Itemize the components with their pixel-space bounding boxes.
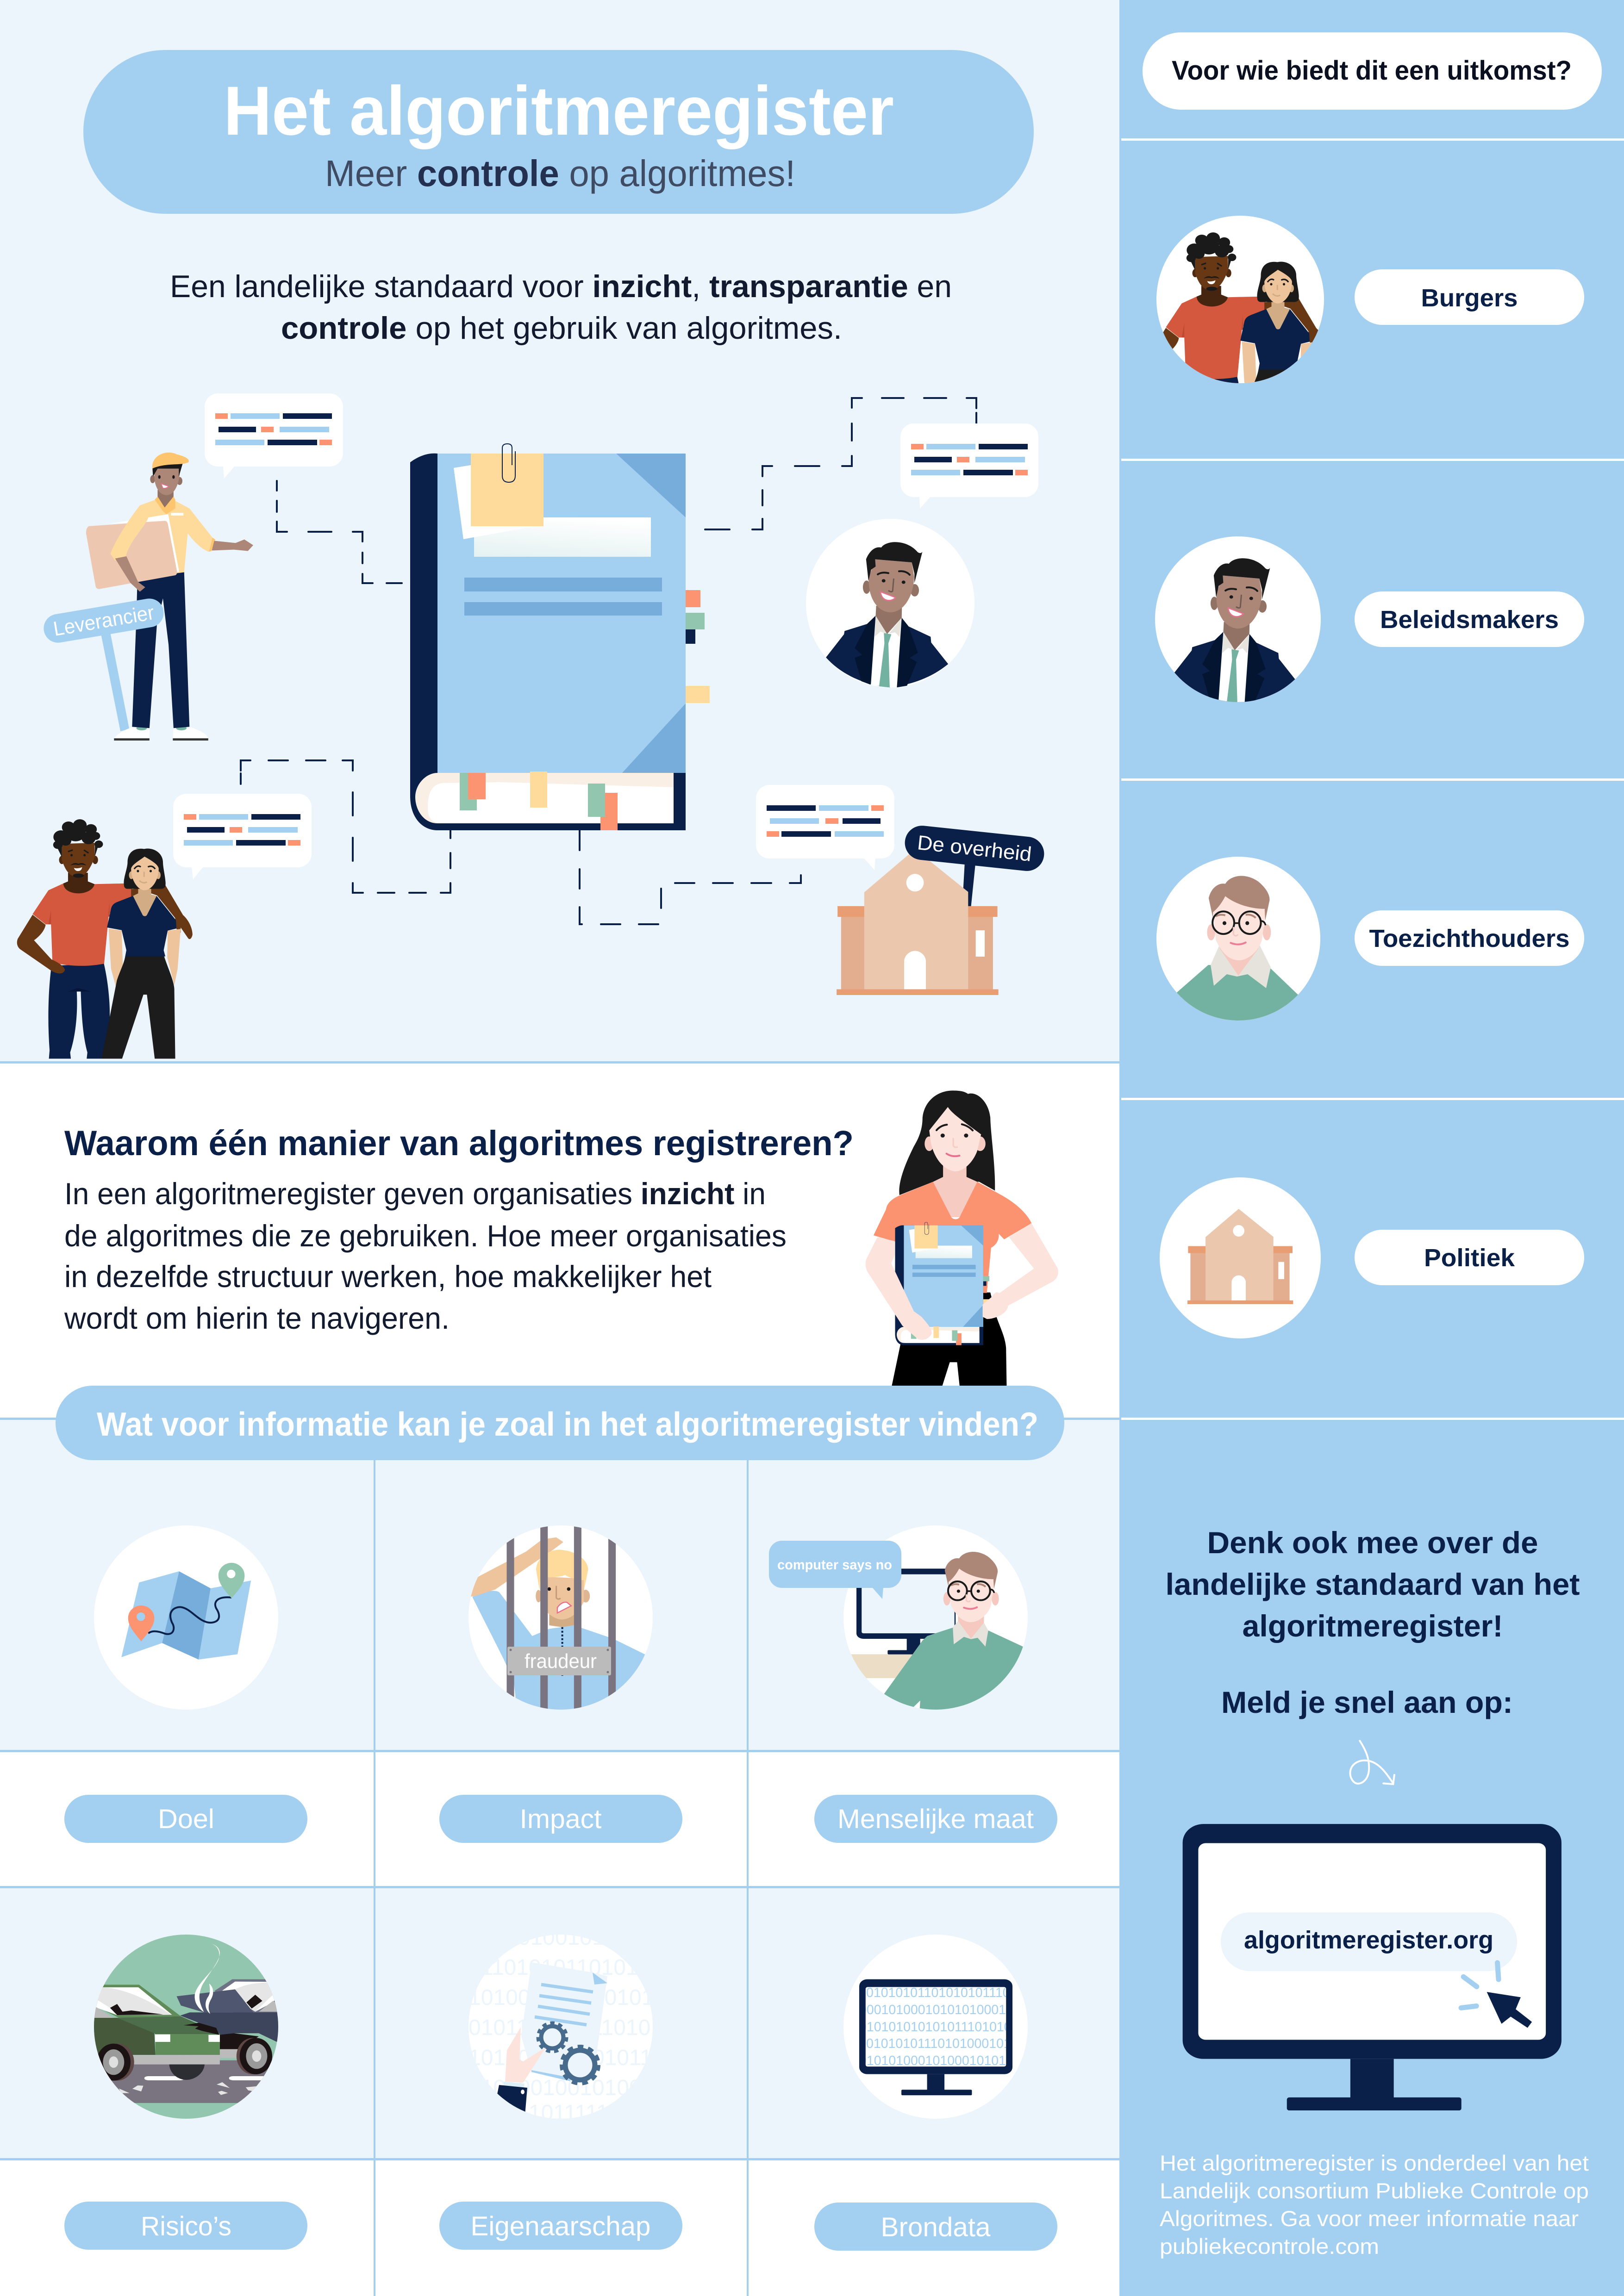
intro text: Een landelijke standaard voor inzicht, transparantie en <box>170 269 952 304</box>
title banner <box>83 50 1034 214</box>
binary background: 1010010101001011010 <box>468 1985 702 2010</box>
icon: map (Doel) <box>94 1525 278 1710</box>
binary background: 0101101010110101001 <box>468 2016 700 2040</box>
label: Menselijke maat <box>814 1795 1057 1843</box>
section banner <box>56 1386 1064 1460</box>
icon: monitor with binary data (Brondata): 0101010001010001010101 <box>859 2053 1021 2068</box>
supplier sign: Leverancier <box>52 601 156 641</box>
label: Doel: Doel <box>158 1804 214 1834</box>
label: Risico's <box>64 2202 307 2250</box>
speech bubble: supplier <box>205 393 343 479</box>
icon: person behind bars (Impact) <box>461 1525 653 1715</box>
call to action text <box>1166 1525 1580 1719</box>
label: Brondata: Brondata <box>881 2212 991 2242</box>
illustration: supplier figure <box>42 453 253 740</box>
label: Impact <box>439 1795 682 1843</box>
audience: Burgers: Burgers <box>1421 284 1518 312</box>
illustration: government building with sign <box>837 824 1046 995</box>
label: Brondata <box>814 2203 1057 2251</box>
nameplate <box>507 1647 611 1675</box>
illustration: woman holding the book <box>866 1090 1058 1386</box>
intro text <box>170 269 952 346</box>
icon: large monitor with url <box>1183 1824 1562 2110</box>
url pill <box>1221 1912 1517 1971</box>
binary background: 0110101011010101101 <box>468 1955 699 1980</box>
audience: Toezichthouders: Toezichthouders <box>1369 925 1569 952</box>
sidebar heading <box>1143 32 1602 110</box>
footer note: Landelijk consortium Publieke Controle op <box>1160 2178 1589 2203</box>
icon: document with gears (Eigenaarschap) <box>468 1935 653 2119</box>
heading: why one way: Waarom één manier van algoritmes registreren? <box>64 1124 854 1163</box>
audience: Toezichthouders <box>1153 857 1584 1027</box>
icon: curly arrow <box>1350 1741 1394 1784</box>
audience: Burgers <box>1156 216 1584 383</box>
label: Menselijke maat: Menselijke maat <box>837 1804 1034 1834</box>
icon: monitor with binary data (Brondata): 0101010101010111010101 <box>859 2020 1018 2035</box>
label: Eigenaarschap <box>439 2202 682 2250</box>
icon: monitor with binary data (Brondata): 0001010001010101000101 <box>859 2003 1021 2017</box>
icon: monitor with binary data (Brondata): 0101010111010100010101 <box>866 2036 1025 2051</box>
binary background: 1010110111110101101 <box>468 2101 693 2125</box>
binary background <box>469 1935 653 2119</box>
illustration: policy maker <box>806 519 974 687</box>
body text: why one way: de algoritmes die ze gebruiken. Hoe meer organisaties <box>64 1219 787 1253</box>
icon: computer says no (Menselijke maat) <box>769 1525 1028 1710</box>
intro text: controle op het gebruik van algoritmes. <box>281 311 842 346</box>
body text: why one way <box>64 1176 787 1335</box>
government sign <box>903 824 1046 873</box>
binary background: 1010010101010110101 <box>468 2046 702 2070</box>
binary background: 0101010010101100101 <box>468 1925 702 1950</box>
footer note: Algoritmes. Ga voor meer informatie naar <box>1160 2206 1579 2231</box>
binary background: 0101001001010010100 <box>468 2076 703 2100</box>
title: Het algoritmeregister <box>224 72 894 149</box>
dashed connectors <box>241 398 976 924</box>
panel: grid backgrounds <box>0 1419 1120 2296</box>
speech bubble: computer says no: computer says no <box>777 1557 892 1573</box>
label: Eigenaarschap: Eigenaarschap <box>470 2211 651 2241</box>
section banner: Wat voor informatie kan je zoal in het algoritmeregister vinden? <box>97 1406 1038 1443</box>
speech bubble: government <box>756 785 894 870</box>
audience: Politiek <box>1160 1177 1584 1338</box>
footer note: Het algoritmeregister is onderdeel van het <box>1160 2151 1589 2175</box>
label: Doel <box>64 1795 307 1843</box>
audience: Beleidsmakers <box>1155 536 1584 703</box>
speech bubble: computer says no <box>769 1541 901 1599</box>
label: Impact: Impact <box>519 1804 602 1834</box>
body text: why one way: in dezelfde structuur werken, hoe makkelijker het <box>64 1259 712 1294</box>
speech bubble: policy maker <box>900 423 1038 509</box>
footer note <box>1160 2151 1589 2259</box>
footer note: publiekecontrole.com <box>1160 2234 1379 2259</box>
body text: why one way: In een algoritmeregister geven organisaties inzicht in <box>64 1176 766 1211</box>
label: Risico's: Risico’s <box>141 2211 231 2241</box>
icon: monitor with binary data (Brondata): 0101010110101010111010 <box>866 1985 1024 2000</box>
call to action text: landelijke standaard van het <box>1166 1567 1580 1601</box>
background: white explanation section <box>0 1062 1120 1419</box>
call to action text: Meld je snel aan op: <box>1221 1685 1513 1719</box>
illustration: citizens couple <box>17 819 193 1058</box>
call to action text: algoritmeregister! <box>1243 1609 1503 1643</box>
audience: Beleidsmakers: Beleidsmakers <box>1380 606 1559 634</box>
icon: car crash (Risico's) <box>94 1935 278 2119</box>
url pill: algoritmeregister.org <box>1244 1926 1493 1954</box>
call to action text: Denk ook mee over de <box>1207 1525 1538 1560</box>
subtitle: Meer controle op algoritmes! <box>325 153 795 194</box>
icon: monitor with binary data (Brondata) <box>843 1935 1028 2119</box>
speech bubble: citizens <box>173 794 312 879</box>
government sign: De overheid <box>916 831 1033 866</box>
body text: why one way: wordt om hierin te navigeren. <box>64 1301 450 1335</box>
illustration: register book <box>410 444 710 830</box>
audience: Politiek: Politiek <box>1424 1244 1515 1272</box>
background: right sidebar <box>1120 0 1624 2296</box>
background: top section <box>0 0 1120 1062</box>
sidebar heading: Voor wie biedt dit een uitkomst? <box>1172 56 1572 86</box>
icon: cursor <box>1461 1963 1532 2028</box>
nameplate: fraudeur <box>525 1650 597 1673</box>
